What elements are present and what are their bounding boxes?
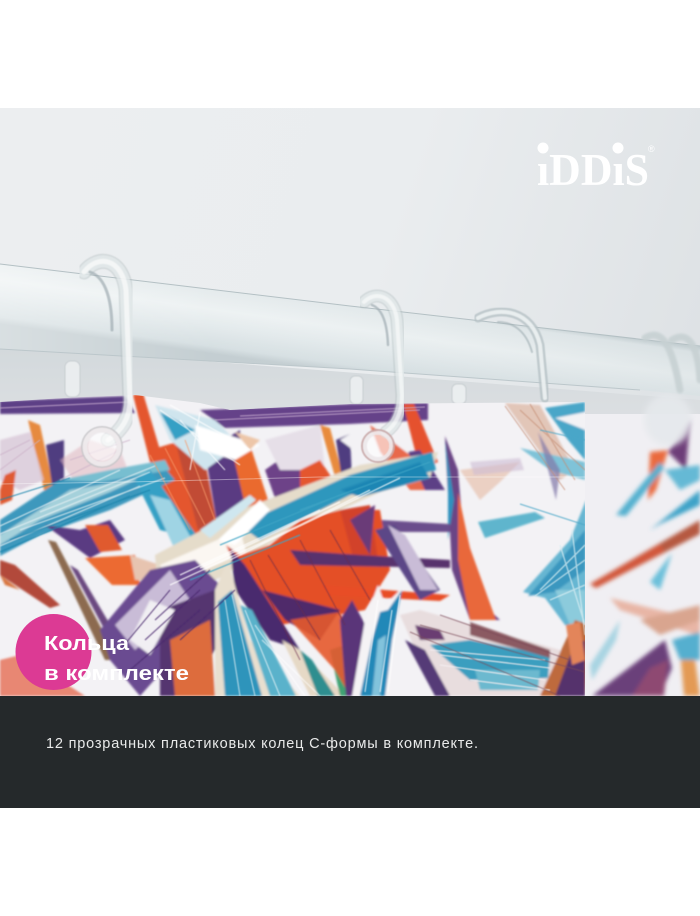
bottom right brush fan xyxy=(400,610,562,696)
transparent ring 1 xyxy=(82,261,130,467)
transparent ring 2 xyxy=(362,296,402,462)
blurred rings 4 and 5 xyxy=(644,335,700,446)
wall shadow under the rod xyxy=(0,345,700,420)
right blue splash xyxy=(523,500,586,640)
orange burst centre right xyxy=(226,510,390,625)
shower curtain rod xyxy=(0,264,700,396)
brand logo: ® xyxy=(648,144,655,154)
left midground xyxy=(45,520,125,558)
caption text: 12 прозрачных пластиковых колец С-формы в комплекте. xyxy=(46,736,478,752)
front curtain panel with abstract print xyxy=(0,393,590,696)
dark caption bar xyxy=(0,696,700,808)
badge label: в комплекте xyxy=(44,663,189,685)
ring hook tips behind the rod xyxy=(65,361,466,404)
band top & top strokes xyxy=(0,396,135,414)
brush streak texture over the print xyxy=(0,402,585,696)
bottom center teal fan xyxy=(215,560,300,696)
curtain hem stitch line xyxy=(0,477,585,484)
transparent ring 3 xyxy=(478,312,545,398)
photo: wall background xyxy=(0,108,700,698)
back curtain panel xyxy=(585,414,700,696)
white-blue spike group xyxy=(352,585,402,696)
badge: pink circle xyxy=(16,614,92,690)
left big blue band xyxy=(0,462,175,556)
badge label: Кольца xyxy=(44,633,130,655)
brand logo: ıDDıS xyxy=(537,145,649,195)
infographic page xyxy=(0,108,700,808)
main cream blue diagonal band xyxy=(154,450,438,581)
right side pale strokes xyxy=(505,403,575,480)
big central orange purple xyxy=(158,442,202,535)
purple central spray xyxy=(100,560,225,696)
